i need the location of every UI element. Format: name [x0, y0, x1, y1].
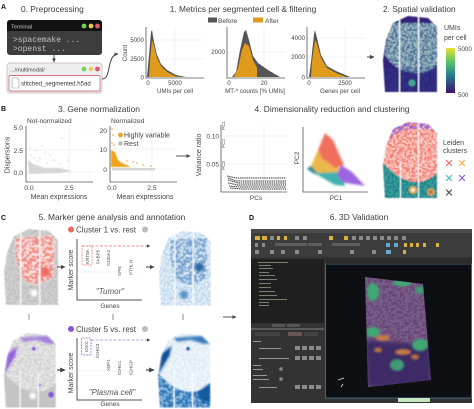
scatter: normalized: Rest [124, 141, 138, 148]
histogram: MT counts: MT-* counts [% UMIs] [225, 88, 285, 95]
arrow: terminal to files [53, 55, 55, 62]
chart: cluster 1 marker scores: FABP5 [96, 249, 100, 264]
chart: cluster 5 marker scores: XBP1 [106, 359, 111, 371]
arrow [57, 266, 65, 268]
chart: cluster 1 marker scores: Marker score [68, 249, 75, 290]
file browser window: stitched_segmented.h5ad [21, 80, 91, 88]
file browser window: .../multimodal/ [10, 68, 45, 74]
scatter: normalized: 0 [103, 167, 107, 174]
chart: variance ratio: PC2 [221, 139, 226, 148]
scatter: not normalized: Not-normalized [27, 118, 72, 125]
histogram: UMIs per cell [122, 27, 204, 95]
3D viewer application window [251, 229, 472, 403]
file browser window [7, 63, 102, 93]
chart: variance ratio: PC1 [221, 121, 226, 130]
arrow [146, 369, 154, 371]
histogram: MT counts: 20 [261, 80, 268, 87]
histogram: UMIs per cell: 5000 [130, 37, 145, 44]
legend: Leiden clusters: ✕ [444, 158, 454, 170]
chart: variance ratio: PCs [250, 195, 263, 202]
legend: before and after [208, 18, 280, 25]
heading: 3D validation: 6. 3D Validation [330, 212, 389, 222]
tissue map: cluster 5 highlighted [4, 332, 56, 407]
scatter: normalized: 20 [99, 128, 107, 135]
terminal window: Terminal [11, 24, 32, 30]
legend: Leiden clusters [443, 140, 468, 200]
chart: cluster 1 marker scores [68, 239, 150, 310]
terminal window: >openst ... [13, 45, 66, 54]
chart: PCA clusters: PC1 [330, 195, 343, 202]
scatter: not normalized: 2.5 [64, 185, 74, 192]
chart: variance ratio: Variance ratio [196, 134, 203, 176]
chart: cluster 5 marker scores: "Plasma cell" [89, 388, 136, 397]
scatter: not normalized: Dispersions [4, 136, 12, 173]
scatter: not normalized: 2.5 [14, 148, 23, 155]
chart: cluster 5 marker scores: Marker score [68, 352, 75, 393]
tissue map: Leiden clusters [383, 121, 437, 198]
histogram: genes per cell: 2000 [291, 54, 306, 61]
chart: cluster 1 marker scores: S100A2 [106, 249, 111, 266]
legend: Leiden clusters: ✕ [457, 173, 467, 185]
histogram: UMIs per cell: 2500 [130, 56, 145, 63]
legend: Leiden clusters: ✕ [444, 188, 454, 200]
heading: spatial validation: 2. Spatial validation [383, 4, 456, 14]
histogram: MT counts: 2000 [211, 49, 226, 56]
chart: PCA clusters: PC2 [294, 151, 301, 164]
properties panel [251, 323, 324, 403]
legend: Leiden clusters: clusters [443, 148, 468, 155]
arrow [146, 266, 154, 268]
histogram: genes per cell: 2500 [338, 80, 352, 87]
chart: cluster 1 marker scores: SPN [117, 267, 122, 276]
3D viewport [326, 258, 472, 402]
heading: preprocessing: 0. Preprocessing [21, 4, 84, 14]
histogram: genes per cell: 4000 [291, 35, 306, 42]
chart: cluster 5 marker scores: IGHGP [128, 360, 134, 375]
histogram: genes per cell: 0 [307, 80, 311, 87]
colour bar legend: UMIs [444, 25, 461, 32]
ellipsis dots [28, 314, 184, 320]
chart: cluster 1 marker scores: "Tumor" [96, 287, 125, 296]
heading: gene normalization: 3. Gene normalization [58, 104, 140, 114]
cluster 5 legend: Cluster 5 vs. rest [76, 325, 137, 334]
scatter: not normalized: 0.0 [14, 170, 23, 177]
histogram: UMIs per cell: 5000 [168, 80, 182, 87]
scatter: normalized: Mean expressions [117, 194, 174, 201]
legend: Leiden clusters: ✕ [444, 173, 454, 185]
arrow to 3D viewer [223, 316, 236, 318]
histogram: genes per cell [291, 27, 365, 95]
chart: cluster 5 marker scores [68, 338, 150, 408]
arrow to dimensionality reduction [176, 155, 190, 157]
heading: metrics: 1. Metrics per segmented cell & filtering [170, 4, 317, 14]
colour bar legend [444, 25, 472, 99]
heading: dimensionality reduction: 4. Dimensionality reduction and clustering [254, 104, 410, 114]
panel D label: D [249, 215, 254, 222]
arrow to spatial validation [367, 56, 374, 58]
chart: PCA clusters [294, 127, 368, 202]
histogram: UMIs per cell: 0 [146, 80, 150, 87]
histogram: UMIs per cell: 0 [141, 74, 145, 82]
scatter: not normalized: Mean expressions [31, 194, 88, 201]
scatter: normalized: 10 [99, 147, 107, 154]
colour bar legend: 5000 [458, 46, 472, 53]
tissue map: cluster 5 marker expression [158, 332, 210, 407]
heading: marker gene analysis: 5. Marker gene analysis and annotation [39, 212, 186, 222]
scatter: normalized: Normalized [111, 118, 145, 125]
histogram: MT counts: 0 [227, 80, 231, 87]
chart: variance ratio: PC3 [221, 161, 226, 170]
scatter: not normalized: 0.0 [24, 185, 34, 192]
chart: cluster 1 marker scores: PTHLH [128, 260, 134, 275]
terminal window [7, 20, 102, 55]
colour bar legend: per cell [444, 35, 467, 42]
toolbar icons [251, 233, 472, 257]
histogram: genes per cell: Genes per cell [320, 88, 360, 95]
chart: cluster 1 marker scores: KRT8A [85, 248, 90, 264]
scatter: not normalized [4, 118, 93, 201]
panel C label: C [1, 215, 6, 222]
legend: before and after: Before [218, 18, 238, 25]
cluster 1 legend: Cluster 1 vs. rest [76, 226, 137, 234]
chart: cluster 5 marker scores: Genes [100, 401, 120, 408]
terminal window: >spacemake ... [13, 36, 80, 45]
chart: variance ratio [196, 121, 287, 202]
chart: variance ratio: 0.05 [206, 162, 219, 168]
curved arrow to metrics [102, 54, 118, 79]
tissue map: UMIs per cell [383, 15, 437, 92]
scatter: normalized: Highly variable [124, 132, 170, 140]
panel A label: A [1, 4, 6, 11]
scatter: normalized: 2.5 [147, 185, 157, 192]
chart: cluster 5 marker scores: IGKC [84, 340, 89, 352]
colour bar legend: 500 [458, 92, 469, 99]
chart: cluster 5 marker scores: IGHG1 [117, 360, 122, 375]
arrow [57, 369, 65, 371]
histogram: UMIs per cell: Count [122, 44, 129, 61]
legend: Leiden clusters: Leiden [443, 140, 464, 147]
histogram: MT counts [211, 27, 285, 95]
tissue map: cluster 1 marker expression [159, 230, 211, 305]
layer list panel [251, 259, 324, 323]
legend: Leiden clusters: ✕ [457, 158, 467, 170]
panel B label: B [1, 106, 6, 113]
histogram: UMIs per cell: UMIs per cell [157, 88, 193, 95]
tissue map: cluster 1 highlighted [4, 228, 58, 305]
chart: cluster 5 marker scores: IGHG3 [95, 343, 100, 358]
scatter: normalized [99, 118, 177, 201]
scatter: normalized: 0.0 [107, 185, 117, 192]
chart: cluster 1 marker scores: Genes [100, 303, 120, 310]
chart: variance ratio: 0.10 [206, 134, 219, 140]
scatter: not normalized: 5.0 [14, 125, 23, 132]
legend: before and after: After [265, 18, 280, 25]
histogram: genes per cell: 0 [302, 74, 306, 82]
